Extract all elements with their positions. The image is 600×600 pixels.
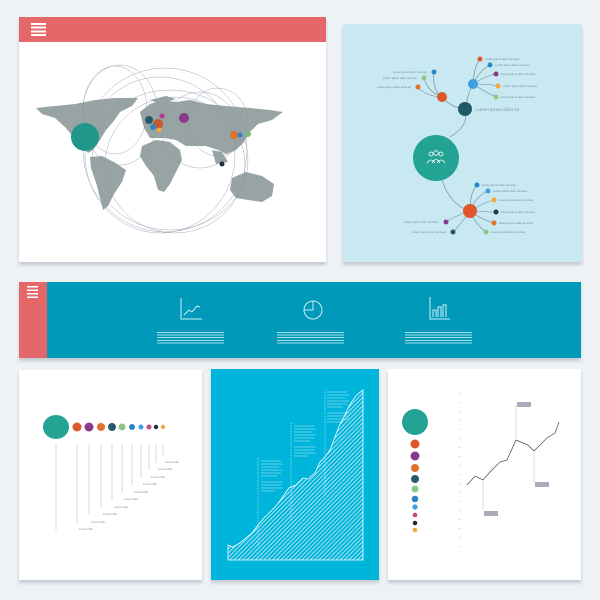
header bar: [19, 17, 326, 42]
icon: menu: [31, 23, 46, 36]
panel: area chart: [211, 369, 379, 580]
panel: network diagram: Lorem ipsum dolor sit amet: [503, 84, 537, 88]
panel: network diagram: Lorem ipsum dolor sit amet: [404, 220, 438, 224]
icon: pie chart: [304, 300, 322, 320]
panel: network diagram: Lorem ipsum dolor sit amet: [501, 210, 535, 214]
panel: bubble timeline: Lorem title: [124, 497, 138, 501]
text blocks: [157, 332, 224, 345]
panel: network diagram: Lorem ipsum dolor sit amet: [493, 189, 527, 193]
panel: bubble timeline: Lorem title: [151, 475, 165, 479]
panel: network diagram: [343, 24, 582, 262]
panel: network diagram: Lorem ipsum dolor sit amet: [491, 230, 525, 234]
panel: bubble timeline: Lorem title: [134, 490, 148, 494]
panel: network diagram: Lorem ipsum dolor sit amet: [501, 95, 535, 99]
side menu block: [19, 282, 47, 358]
panel: bubble timeline: Lorem title: [143, 482, 157, 486]
panel: network diagram: Lorem ipsum dolor sit amet: [482, 183, 516, 187]
panel: network diagram: Lorem ipsum dolor sit amet: [501, 72, 535, 76]
panel: network diagram: Lorem ipsum dolor sit amet: [495, 63, 529, 67]
icon: line chart: [180, 298, 202, 320]
panel: bubble timeline: Lorem title: [114, 505, 128, 509]
panel: bubble timeline: Lorem title: [103, 512, 117, 516]
panel: network diagram: Lorem ipsum dolor sit amet: [383, 76, 417, 80]
map chart: [36, 64, 283, 234]
panel: network diagram: Lorem ipsum dolor sit amet: [412, 230, 446, 234]
panel: network diagram: Lorem ipsum dolor sit amet: [393, 70, 427, 74]
panel: world map: [19, 17, 326, 262]
panel: network diagram: Lorem ipsum dolor sit: [476, 107, 520, 112]
panel: line chart: [388, 369, 581, 580]
panel: bubble timeline: Lorem title: [91, 520, 105, 524]
panel: network diagram: Lorem ipsum dolor sit amet: [499, 221, 533, 225]
banner: [19, 282, 581, 358]
panel: bubble timeline: Lorem title: [158, 467, 172, 471]
panel: network diagram: Lorem ipsum dolor sit amet: [377, 85, 411, 89]
panel: bubble timeline: Lorem title: [165, 460, 179, 464]
icon: bar chart: [430, 297, 450, 320]
panel: network diagram: Lorem ipsum dolor sit amet: [499, 198, 533, 202]
panel: network diagram: Lorem ipsum dolor sit amet: [485, 57, 519, 61]
panel: bubble timeline: Lorem title: [79, 527, 93, 531]
panel: bubble timeline: [19, 370, 202, 580]
